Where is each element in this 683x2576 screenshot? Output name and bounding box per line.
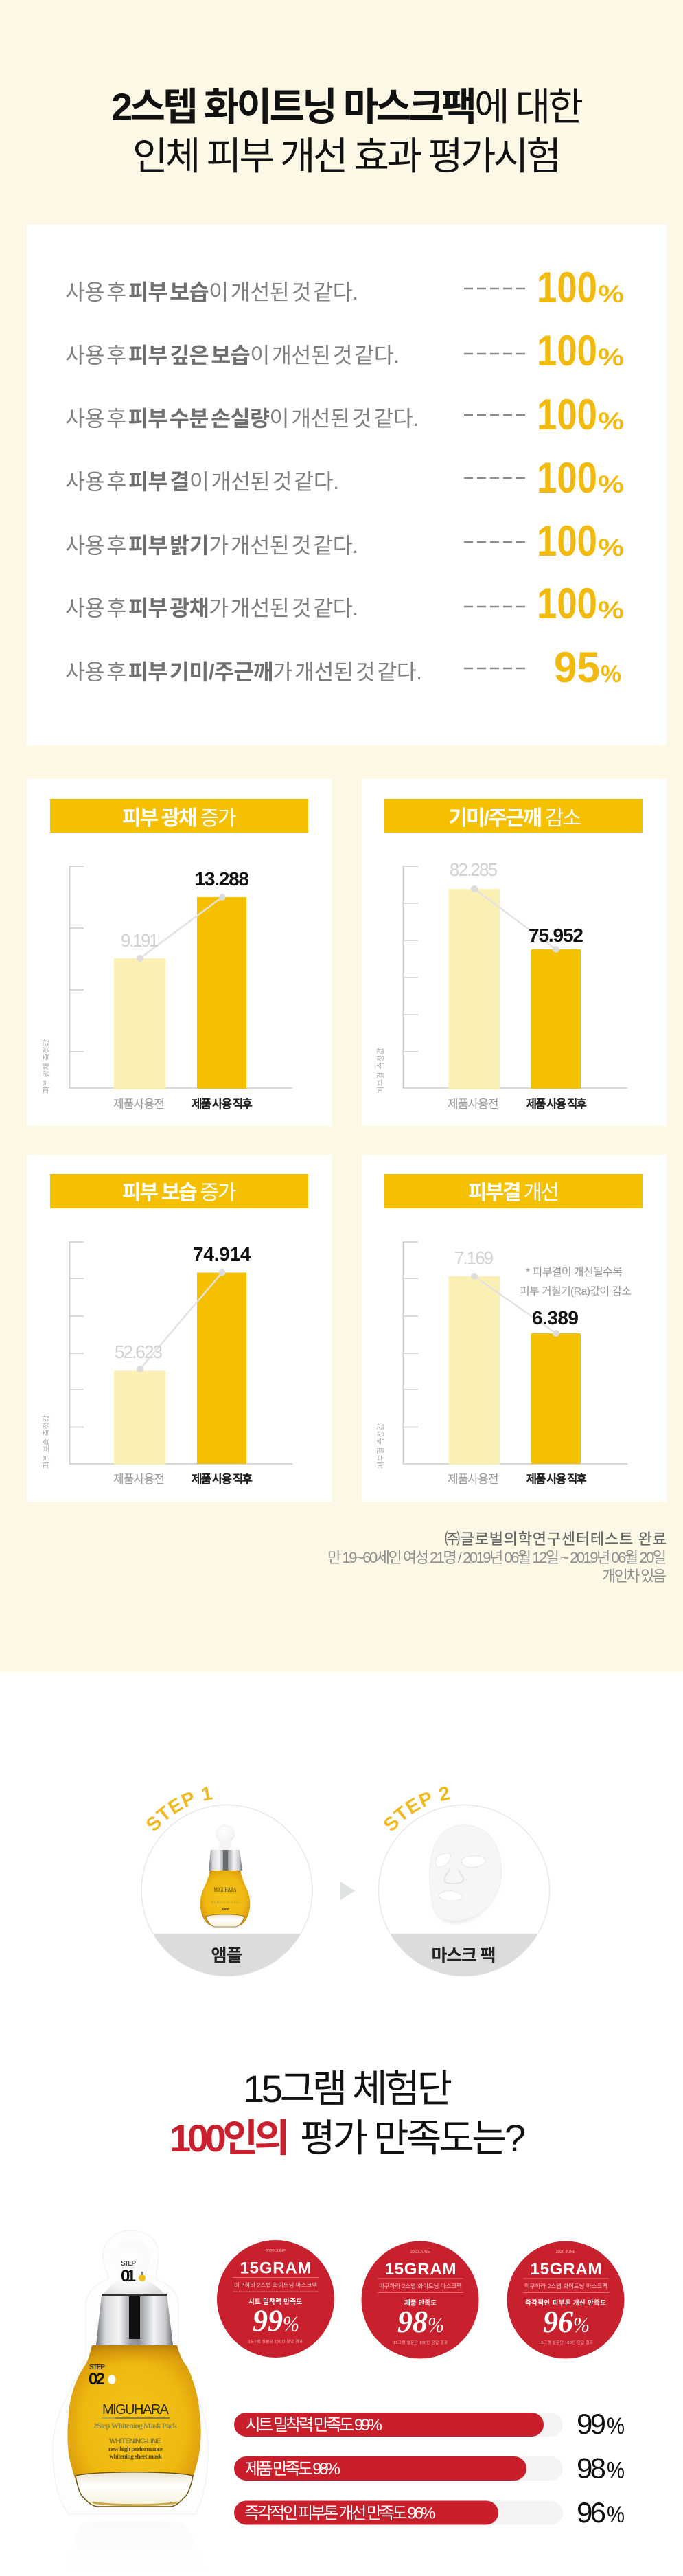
progress bar: sheet adhesion: %	[607, 2413, 625, 2439]
progress bar: sheet adhesion	[234, 2408, 625, 2440]
bottle shoulder shading	[69, 2345, 200, 2415]
bottle label: whitening sheet mask	[109, 2454, 163, 2461]
x labels: 제품사용전	[448, 1473, 498, 1486]
chart note: 피부 거칠기(Ra)값이 감소	[520, 1285, 632, 1298]
x labels: 제품 사용 직후	[526, 1098, 587, 1111]
icon: ampoule bottle: WHITENING-LINE	[211, 1901, 240, 1905]
gold base rim	[93, 2502, 177, 2505]
y axis and ticks	[70, 1242, 292, 1464]
bottle label: new high performance	[108, 2446, 163, 2453]
survey row 7: %	[601, 661, 621, 688]
progress bar: skin tone: %	[607, 2502, 625, 2528]
badge: product 98: 미구하라 2스텝 화이트닝 마스크팩	[379, 2283, 462, 2290]
chart heading	[50, 799, 308, 833]
step 02 mark	[89, 2364, 115, 2388]
badge: product 98	[361, 2241, 479, 2359]
survey row 4: 100	[537, 454, 597, 502]
survey row 4: 사용 후 피부 결이 개선된 것 같다.	[65, 469, 339, 494]
icon: ampoule bottle	[200, 1825, 250, 1927]
badge: product 98: 2020 JUNE	[410, 2250, 430, 2255]
survey row 3: 사용 후 피부 수분 손실량이 개선된 것 같다.	[65, 406, 419, 431]
step 1: ampoule	[141, 1787, 313, 1977]
y axis label: 피부 광채 측정값	[42, 1039, 51, 1094]
survey row 5: 100	[537, 517, 597, 565]
survey row 1: 100	[537, 264, 597, 312]
bar: after	[531, 949, 581, 1089]
survey row 3	[65, 391, 624, 439]
progress bar: sheet adhesion: 시트 밀착력 만족도 99%	[246, 2416, 382, 2434]
bar: before	[449, 1276, 500, 1465]
test credits: 만 19~60세인 여성 21명 / 2019년 06월 12일 ~ 2019년 06월 20일	[327, 1549, 667, 1566]
badge: skin tone 96	[507, 2241, 625, 2359]
x labels	[448, 1473, 587, 1486]
x labels: 제품사용전	[113, 1098, 165, 1111]
trend line	[471, 1273, 559, 1337]
badge: skin tone 96: 96	[543, 2304, 573, 2339]
step 01 mark: 01	[121, 2267, 136, 2285]
icon: ampoule bottle: 30ml	[221, 1908, 229, 1912]
y axis and ticks	[70, 866, 292, 1088]
badge: skin tone 96: 15그램 설문단 100인 응답 결과	[539, 2340, 593, 2345]
survey row 7: 95	[554, 644, 600, 692]
step 01 mark: STEP	[121, 2260, 136, 2268]
product: 2-step bottle sachet	[53, 2230, 208, 2576]
survey row 7	[65, 644, 621, 692]
badge: product 98: 98	[397, 2304, 428, 2339]
survey row 5: 사용 후 피부 밝기가 개선된 것 같다.	[65, 533, 358, 558]
x labels: 제품 사용 직후	[526, 1473, 587, 1486]
survey row 2: 100	[537, 327, 597, 375]
y axis and ticks	[404, 866, 627, 1088]
value after: 75.952	[529, 925, 583, 946]
chart heading	[384, 1174, 643, 1208]
progress bar: product	[234, 2452, 625, 2484]
value before: 9.191	[121, 930, 159, 951]
progress bar: sheet adhesion: 99	[577, 2408, 606, 2440]
trend line	[471, 885, 559, 953]
panel: spots and freckles chart	[362, 779, 667, 1126]
bottle label	[93, 2402, 178, 2461]
silver collar	[96, 2294, 173, 2345]
arrow	[340, 1882, 355, 1900]
reflection	[69, 2521, 205, 2576]
survey row 4: %	[598, 471, 624, 498]
badge: sheet adhesion 99: 시트 밀착력 만족도	[248, 2298, 302, 2306]
test credits	[327, 1530, 667, 1585]
collar top edge	[102, 2294, 167, 2296]
bar: after	[197, 1272, 246, 1464]
badge: sheet adhesion 99	[217, 2240, 334, 2358]
badge: sheet adhesion 99: 2020 JUNE	[266, 2249, 286, 2253]
trend line	[137, 1269, 225, 1372]
progress bar: product: 98	[577, 2452, 606, 2484]
badge: sheet adhesion 99: 99	[253, 2303, 283, 2338]
progress bar: product: 제품 만족도 98%	[245, 2460, 340, 2478]
x labels: 제품 사용 직후	[192, 1473, 253, 1486]
survey row 1: 사용 후 피부 보습이 개선된 것 같다.	[65, 280, 358, 304]
bar: before	[114, 958, 165, 1089]
survey row 6: 사용 후 피부 광채가 개선된 것 같다.	[65, 596, 358, 620]
y axis label: 피부 보습 측정값	[42, 1415, 51, 1469]
step 01 mark	[121, 2260, 146, 2285]
chart note	[520, 1266, 632, 1298]
progress bar: skin tone	[234, 2496, 625, 2529]
survey row 3: %	[598, 408, 624, 435]
value after: 13.288	[195, 868, 249, 890]
y axis and ticks	[404, 1242, 627, 1464]
badge: sheet adhesion 99: 미구하라 2스텝 화이트닝 마스크팩	[234, 2282, 317, 2289]
step 2 band	[391, 1934, 537, 1976]
survey row 2	[65, 327, 624, 375]
badge: skin tone 96: 2020 JUNE	[556, 2250, 575, 2255]
survey row 2: %	[598, 344, 624, 371]
survey row 2: 사용 후 피부 깊은 보습이 개선된 것 같다.	[65, 343, 400, 368]
progress bar: skin tone: 즉각적인 피부톤 개선 만족도 96%	[244, 2505, 435, 2522]
heading: 15gram survey	[170, 2067, 526, 2160]
bottle label: 2Step Whitening Mask Pack	[93, 2422, 178, 2430]
icon: sheet mask	[429, 1825, 502, 1923]
badge: skin tone 96: 15GRAM	[530, 2260, 601, 2279]
chart note: * 피부결이 개선될수록	[526, 1266, 623, 1278]
survey row 6: %	[598, 597, 624, 624]
badge: product 98: 15그램 설문단 100인 응답 결과	[393, 2340, 448, 2345]
survey row 1	[65, 264, 624, 312]
y axis label: 피부결 측정값	[376, 1423, 385, 1469]
badge: sheet adhesion 99: 15그램 설문단 100인 응답 결과	[248, 2338, 303, 2344]
x labels: 제품사용전	[113, 1473, 165, 1486]
title: 2스텝 화이트닝 마스크팩에 대한	[111, 85, 583, 128]
value before: 7.169	[454, 1247, 494, 1268]
badge: skin tone 96: %	[573, 2312, 590, 2337]
heading: 15gram survey: 100인의	[170, 2116, 290, 2160]
dropper tube	[129, 2296, 140, 2339]
value before: 52.623	[115, 1342, 163, 1362]
survey row 1: %	[598, 281, 624, 308]
x labels	[113, 1473, 253, 1486]
value after: 6.389	[532, 1307, 579, 1329]
trend line	[137, 894, 225, 962]
test credits: 개인차 있음	[602, 1568, 667, 1585]
x labels	[113, 1098, 253, 1111]
cream background section	[0, 0, 683, 1671]
sachet outline	[53, 2230, 208, 2514]
chart heading: 피부 보습 증가	[122, 1182, 236, 1204]
y axis label: 피부결 측정값	[376, 1048, 385, 1094]
value before: 82.285	[450, 859, 498, 880]
survey row 6	[65, 580, 624, 628]
survey row 7: 사용 후 피부 기미/주근깨가 개선된 것 같다.	[65, 659, 422, 684]
x labels: 제품 사용 직후	[192, 1098, 253, 1111]
value after: 74.914	[193, 1243, 251, 1265]
x labels	[448, 1098, 587, 1111]
chart heading	[384, 799, 643, 833]
glass base	[76, 2472, 193, 2507]
bar: after	[531, 1333, 581, 1464]
chart heading: 피부결 개선	[468, 1182, 559, 1204]
chart heading: 피부 광채 증가	[122, 807, 236, 830]
bottle label: MIGUHARA	[102, 2402, 170, 2417]
bottle label: WHITENING-LINE	[109, 2437, 161, 2445]
step 02 mark: 02	[89, 2370, 105, 2388]
survey row 6: 100	[537, 580, 597, 628]
bottle body	[67, 2345, 201, 2507]
heading: 15gram survey: 15그램 체험단	[243, 2067, 452, 2110]
survey row 4	[65, 454, 624, 502]
badge: product 98: 15GRAM	[384, 2260, 456, 2279]
badge: sheet adhesion 99: %	[283, 2311, 299, 2336]
heading: 15gram survey: 평가 만족도는?	[300, 2116, 526, 2160]
badge: skin tone 96: 미구하라 2스텝 화이트닝 마스크팩	[524, 2283, 607, 2290]
step 1 label: STEP 1	[147, 1787, 213, 1831]
panel: survey results	[27, 225, 667, 745]
step 2 label: STEP 2	[384, 1787, 450, 1831]
bottle dropper	[103, 2239, 165, 2294]
title: 인체 피부 개선 효과 평가시험	[132, 135, 562, 178]
step 2: mask pack	[378, 1787, 551, 1977]
bar: before	[449, 889, 500, 1089]
badge: product 98: %	[428, 2312, 444, 2337]
bar: before	[114, 1371, 165, 1465]
survey row 3: 100	[537, 391, 597, 439]
step 2 circle	[379, 1805, 549, 1976]
chart heading: 기미/주근깨 감소	[449, 807, 581, 830]
step 1 band	[154, 1934, 301, 1976]
progress bar: product: %	[607, 2458, 625, 2484]
panel: skin texture chart	[362, 1155, 667, 1502]
badge: skin tone 96: 즉각적인 피부톤 개선 만족도	[525, 2298, 606, 2307]
step 02 mark: STEP	[89, 2364, 105, 2371]
test credits: ㈜글로벌의학연구센터테스트 완료	[445, 1530, 667, 1548]
survey row 5: %	[598, 534, 624, 561]
chart heading	[50, 1174, 308, 1208]
progress bar: skin tone: 96	[577, 2496, 606, 2529]
step 2 name: 마스크 팩	[431, 1946, 496, 1965]
panel: skin moisture chart	[27, 1155, 332, 1502]
icon: ampoule bottle: MIGUHARA	[214, 1887, 237, 1894]
x labels: 제품사용전	[448, 1098, 498, 1111]
badge: product 98: 제품 만족도	[404, 2298, 437, 2307]
step 1 circle	[141, 1805, 312, 1976]
step 1 name: 앰플	[211, 1946, 242, 1965]
survey row 5	[65, 517, 624, 565]
title	[111, 85, 583, 178]
badge: sheet adhesion 99: 15GRAM	[240, 2259, 312, 2278]
panel: skin radiance chart	[27, 779, 332, 1126]
bar: after	[197, 897, 246, 1089]
